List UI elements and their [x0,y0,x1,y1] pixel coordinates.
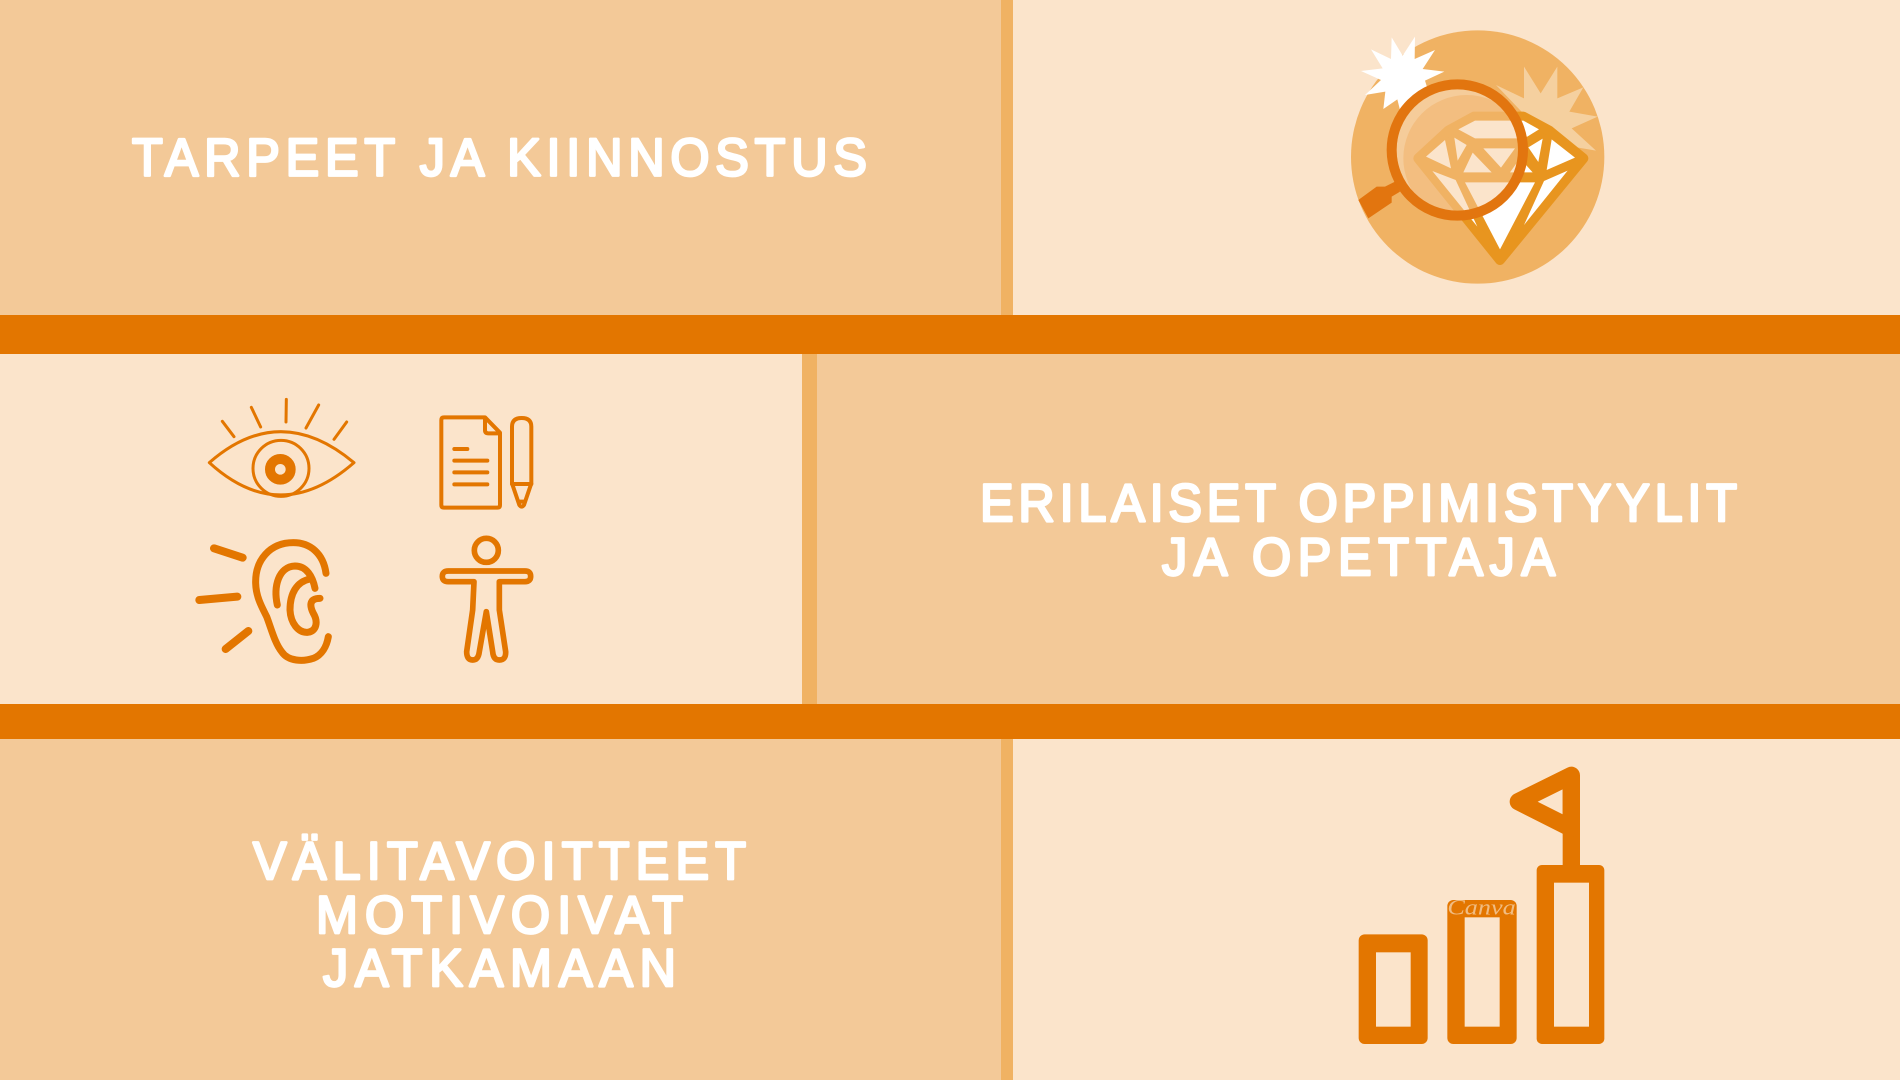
panel: bottom left [0,739,1013,1080]
panel: middle right [817,354,1900,704]
band: upper [0,315,1900,354]
panel: bottom right [1013,739,1900,1080]
band: lower [0,704,1900,739]
heading: learning styles: ERILAISET OPPIMISTYYLIT [980,473,1737,532]
heading: milestones: JATKAMAAN [323,938,676,997]
panel: top left [0,0,1013,315]
heading: milestones: MOTIVOIVAT [316,885,683,944]
panel: top right [1013,0,1900,315]
heading: learning styles: JA OPETTAJA [1162,527,1556,586]
heading: learning styles [980,473,1737,586]
heading: milestones [253,831,746,997]
icon: rising bars with flag [1359,775,1604,1044]
icon: eye [209,399,354,496]
heading: milestones: VÄLITAVOITTEET [253,831,746,890]
icon: person [442,538,531,660]
panel: middle left [0,354,817,704]
icon: ear [199,543,328,660]
watermark: Canva [1447,894,1516,919]
icon: document and pencil [441,417,531,508]
icon: diamond under magnifying glass [1351,30,1604,284]
heading: needs and interest: TARPEET JA KIINNOSTUS [132,127,867,187]
